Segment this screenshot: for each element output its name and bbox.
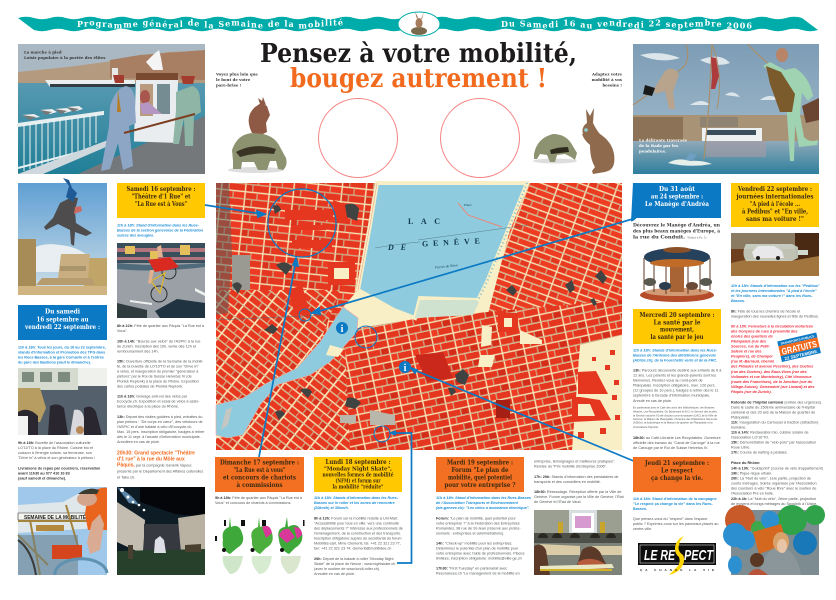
text: vendredi: Plainpalais :	[731, 416, 751, 420]
text: lundi: (avec le soutien de www.lundi-roller.ch).	[314, 567, 380, 571]
badge: transports publics gratuits: 22 SEPTEMBRE	[784, 349, 818, 361]
box: samedi 16 septembre: "Théâtre d'1 Rue" et	[132, 194, 191, 200]
text: samedi programme: des cartes postales de Plonk& Replonk.	[117, 384, 183, 388]
arrow: Dimanche to map	[259, 258, 298, 457]
box: du samedi au vendredi: vendredi 22 septembre :	[24, 324, 100, 331]
text: vendredi: Pâquis (rue de Zurich).	[731, 390, 772, 394]
text: lundi: 8h à 13h: Forum sur la mobilité réduite à Uni-Mail:	[314, 516, 398, 520]
icon: hare	[582, 108, 614, 174]
text: samedi programme	[117, 324, 205, 480]
text: lundi	[314, 496, 403, 576]
text: mardi: 17h30: "First Tuesday" en partenariat avec	[436, 566, 507, 570]
box: dimanche: "La Rue est à vous"	[234, 467, 286, 474]
text: dimanche	[215, 496, 303, 505]
text: stands information: 11h à 18h: Tous les jours, du 16 au 22 septembre,	[18, 346, 106, 350]
text: manège: des plus beaux manèges d'Europe, à	[633, 228, 720, 234]
text: samedi programme: 10h à 14h: "Bourse aux vélos" de l'ASPIC à la rue	[117, 340, 200, 344]
text: stand samedi	[117, 224, 204, 238]
logo: le respect: ÇA CHANGE LA VIE	[640, 568, 714, 572]
text: mercredi: (12 groupes de 10 pers.), badges à retirer dès le 11	[633, 388, 718, 392]
badge: transports publics gratuits: TRANSPORTS PUBLICS	[780, 334, 815, 346]
box: du 31 août: Le Manège d'Andréa	[645, 201, 709, 208]
photo caption: La marche à pied	[24, 50, 62, 54]
header banner	[18, 12, 818, 36]
box: vendredi: journées internationales	[736, 194, 814, 200]
box: mercredi	[633, 309, 721, 344]
text: samedi programme: 11h à 18h: Gravage anti-vol des vélos par	[117, 394, 188, 398]
text: lundi: Basses sur le roller et les zones de rencontre	[314, 501, 395, 505]
text: vendredi: Place du Rhône:	[731, 461, 760, 465]
box: vendredi: à Pedibus" et "En ville,	[742, 208, 808, 216]
text: manège: Découvrez le Manège d'Andréa, un	[633, 222, 721, 228]
text: vendredi: Rotonde de l'hôpital cantonal (entrée des urgences).	[731, 400, 822, 404]
text: vendredi: 8h: Fête de tous les chemins de l'école et	[731, 310, 801, 314]
text: vendredi: 15h: Démonstration de "vélo-polo" par l'association	[731, 440, 816, 444]
text: vendredi: 11h: Inauguration du Carrousel à traction (attraction)	[731, 420, 819, 424]
left note: Voyez plus loin que	[215, 72, 258, 76]
text: samedi programme: tance électrique à la place du Rhône.	[117, 404, 179, 408]
box: du 31 août: au 24 septembre :	[651, 194, 703, 200]
text: mardi: limitées, inscription obligatoire: mobilite@ville-ge.ch	[436, 556, 522, 560]
text: vendredi: des Pléiades et avenue Peschier), des Ouches	[731, 364, 813, 368]
text: dimanche: 9h à 18h: Fête de quartier aux Pâquis "La Rue est à	[215, 496, 303, 500]
box: mardi: Mardi 19 septembre :	[447, 460, 513, 466]
box: mardi: Forum "Le plan de	[452, 467, 509, 474]
box: lundi: la mobilité "réduite"	[332, 484, 384, 490]
text: manège: Ticket à Fr. 5.-	[687, 236, 708, 240]
box: lundi: Lundi 18 septembre :	[326, 459, 390, 466]
box: lundi: (NFM) et forum sur	[336, 478, 381, 484]
text: lundi: Skate" de la place de Neuve ; www.nightskate.ch	[314, 562, 395, 566]
box: du 31 août	[631, 183, 721, 222]
photo: conference	[534, 510, 622, 575]
logo: le respect	[638, 536, 716, 575]
banner oval emblem	[398, 12, 440, 36]
text: mercredi	[633, 348, 722, 450]
box: du samedi au vendredi: 16 septembre au	[36, 316, 89, 324]
text: vendredi: Village-Suisse), Geisendorf (rue Liotard) et des	[731, 385, 814, 389]
box: mercredi: mouvement,	[660, 326, 694, 334]
text: vendredi: Dans le cadre du 150ème anniversaire de l'Hôpital	[731, 406, 815, 410]
info markers: i	[341, 324, 344, 335]
circle right	[440, 98, 520, 178]
box: vendredi	[731, 183, 819, 227]
box: mardi: mobilité, quel potentiel	[448, 474, 513, 482]
photo caption: de la Rade par les	[639, 143, 679, 148]
text: stand samedi: 11h à 18h: Stand d'information dans les Rues-	[117, 224, 200, 228]
photo: stunt bike	[117, 243, 205, 318]
map labels: DE	[387, 243, 406, 252]
box: vendredi: "A pied à l'école ...	[750, 201, 800, 208]
text: vendredi: 22h à 4h: La "Nuit du vélo", 2ème partie, projection	[731, 497, 816, 501]
text: jeudi: Basses.	[633, 507, 647, 511]
info markers: i	[404, 363, 407, 374]
text: mercredi: chocolaterie Pignolet.	[633, 425, 659, 429]
arrow: Jeudi to map	[411, 368, 636, 462]
text: samedi programme: Vous".	[117, 329, 128, 333]
text: stands information	[18, 346, 106, 364]
info markers	[336, 322, 411, 374]
text: vendredi: humaine.	[731, 426, 746, 430]
text: mardi: 17h: 20h: Stands d'information des prestataires de	[534, 475, 619, 479]
text: vendredi: courts métrages. Soirée organisée par l'Association	[731, 482, 817, 486]
box: du 31 août: Du 31 août	[659, 186, 695, 193]
text: vendredi: (route des Franchises), de la Jonction (rue du	[731, 380, 813, 384]
text: mardi: 18h30: Réseautage. Réception offerte par la Ville de	[534, 490, 621, 494]
text: vendredi: (rue des Ouches), des Eaux-Vives (rue des	[731, 370, 807, 374]
box: samedi 16 septembre: Samedi 16 septembre :	[126, 186, 196, 193]
text: stands information: stands d'information et Promotion des TPG dans	[18, 350, 105, 354]
text: samedi programme: de Zurich. Inscription dès 10h, vente dès 12h et	[117, 344, 197, 348]
text: vendredi: Sources, rue du Petit-	[731, 344, 771, 348]
text: vendredi: Plainpalais (rue des	[731, 340, 766, 344]
illustration: shopping trolleys	[215, 517, 304, 574]
text: vendredi: écoles des quartiers de	[731, 334, 773, 338]
text: stand samedi: Basses de la section genevoise de la Fédération	[117, 228, 204, 232]
arrow: Manège to map	[312, 218, 636, 314]
text: samedi programme: à vélos, et inauguration du premier "générateur à	[117, 370, 199, 374]
text: lundi: (20km/h) et 30km/h.	[314, 506, 349, 510]
photo: car in bottle	[731, 233, 819, 276]
box: jeudi	[633, 457, 721, 492]
text: mercredi: 12 ans. Les parents et les grands-parents sont les	[633, 374, 716, 378]
text: buvette: LO'10'TO à la place du Rhône. Cuisine bio et	[18, 446, 94, 450]
box: vendredi: sans ma voiture !"	[746, 216, 804, 223]
text: vendredi: l'Association Pré en bulle.	[731, 492, 774, 496]
text: mardi: votre entreprise ?" à la Fédération des Entreprises	[436, 522, 520, 526]
title: bougez autrement !	[290, 64, 547, 94]
box: du samedi au vendredi	[18, 305, 107, 340]
text: buvette	[18, 441, 101, 480]
text: mardi: votre entreprise avec l'aide de professionnels. Places	[436, 552, 525, 556]
text: vendredi: Roue Libre.	[731, 446, 750, 450]
text: manège: la rue du Conduit.	[633, 234, 685, 240]
box: jeudi: ça change la vie.	[651, 475, 703, 482]
text: lundi: 11h à 18h: Stands d'information dans les Rues-	[314, 496, 399, 500]
illustration: carousel	[640, 247, 714, 302]
right note: mobilité à vos	[592, 77, 623, 82]
text: buvette: cuisson à l'énergie solaire, sa fermeuse, son	[18, 451, 92, 455]
text: vendredi: Basses.	[731, 299, 745, 303]
text: mercredi: Annulé en cas de pluie.	[633, 399, 672, 403]
map labels: GENÈVE	[422, 235, 480, 248]
text: mercredi: 11h à 18h: Stands d'information dans les Rues-	[633, 348, 718, 352]
text: samedi programme: l'ASPIC et d'une balade à vélo d'Ecocycle.ch.	[117, 425, 192, 429]
logo: le respect: PECT	[684, 547, 714, 564]
text: vendredi	[731, 284, 824, 506]
text: jeudi: centre-ville.	[633, 527, 652, 531]
text: mercredi: Genève, la Maison de Plainpalais, l'Antenne des Diététiciens Genevois	[633, 417, 718, 421]
map of Geneva	[216, 183, 622, 450]
photo caption: pendulaires.	[639, 148, 667, 154]
text: vendredi: Salève et rue des	[731, 350, 762, 354]
text: vendredi: et les journées internationales "A pied à l'école"	[731, 289, 817, 293]
text: mercredi: bienvenus. Rendez-vous au rond-point de	[633, 378, 703, 382]
text: vendredi: 17h: Course de karting à pédales.	[731, 450, 788, 454]
box: mercredi: Mercredi 20 septembre :	[640, 312, 714, 319]
title: Pensez à votre mobilité,	[260, 39, 577, 69]
text: mardi: Genève. Forum organisé par la Ville de Genève, l'État	[534, 494, 625, 499]
text: mardi	[436, 460, 625, 576]
text: mercredi: officielle des travaux du "Canal de Carouge" à la rue	[633, 441, 720, 445]
text: mardi: de Genève et l'État de Vaud.	[534, 499, 582, 504]
left note: pare-brise !	[216, 82, 242, 88]
left note: le bout de votre	[216, 77, 251, 82]
photo caption: Loisir populaire à la portée des élites	[24, 55, 106, 60]
photo: sedan chair on the quay	[18, 44, 205, 174]
text: mercredi: 13h: Parcours découverte destiné aux enfants de 6 à	[633, 368, 722, 372]
arrow: Lundi to map	[391, 431, 412, 563]
text: lundi: Inscription obligatoire auprès du secrétariat du forum	[314, 536, 402, 540]
right note: besoins !	[602, 82, 622, 88]
logo: le respect: LE RE	[644, 547, 676, 564]
text: samedi programme: Annulées en cas de pluie.	[117, 440, 160, 444]
banner right text: Du Samedi 16 au vendredi 22 septembre 2006	[501, 18, 752, 30]
text: vendredi: 20h: La "Nuit du vélo", 1ère partie, projection de	[731, 476, 811, 480]
box: mardi	[436, 457, 524, 492]
text: lundi: des déplacements ?" Intéresse aux professionnels de	[314, 526, 403, 530]
text: vendredi: inauguration des nouvelles lignes et fête du Pedibus.	[731, 314, 819, 318]
box: dimanche	[215, 457, 304, 492]
text: mercredi: la Service social et l'Unité d'action communautaire (UAC) de la Ville de	[633, 414, 718, 418]
map labels: Pierres du Niton	[434, 263, 458, 270]
text: buvette: Livraisons de repas par coursiers, réservation	[18, 466, 101, 470]
text: mercredi: septembre à l'arcade d'information municipale.	[633, 394, 710, 398]
box: mardi: pour votre entreprise ?	[444, 482, 516, 489]
Rhône river	[216, 307, 358, 438]
text: vendredi: des coursiers à vélo "Roue libre" avec le soutien de	[731, 486, 816, 490]
text: buvette: avant 11h30 au 077 410 10 83	[18, 472, 70, 476]
box: dimanche: à commissions	[236, 482, 283, 489]
text: samedi programme: dès le 11 sept. à l'arcade d'information municipale.	[117, 435, 201, 439]
text: mardi: entreprise, témoignages et meilleures pratiques".	[534, 460, 615, 464]
text: mercredi: Plainpalais. Inscription obligatoire, max. 120 pers.	[633, 384, 716, 388]
text: samedi programme: 13h: Départ des visites guidées à pied, extraites du	[117, 415, 202, 419]
box: jeudi: Jeudi 21 septembre :	[644, 460, 709, 467]
text: mercredi: (ADiGe.ch), de la Fourchette verte et de la FRC.	[633, 358, 717, 362]
text: samedi programme: 15h: Ouverture officielle de la Semaine de la mobili-	[117, 360, 204, 364]
text: samedi programme: té, de la buvette de LO'10'TO et de son "Drive In"	[117, 364, 199, 368]
photo: night spectacle	[117, 487, 205, 575]
text: mardi: de l'Association Transports et Environnement	[436, 501, 519, 505]
text: buvette: (sauf samedi et dimanche).	[18, 476, 66, 480]
text: mardi: Déterminez le potentiel d'un plan de mobilité pour	[436, 546, 519, 550]
box: mercredi: la santé par le jeu	[650, 334, 704, 341]
text: mercredi: de Carouge par le Roi de Suisse Helvetus IV.	[633, 446, 708, 450]
arrow: Samedi to map	[205, 205, 265, 217]
text: samedi programme: d'1 rue" à la rue du Môle aux	[117, 456, 185, 462]
text: samedi programme: Plonk& Replonk) à la place du Rhône. Exposition	[117, 380, 199, 384]
box: samedi 16 septembre: "La Rue est à Vous"	[135, 201, 187, 208]
left note	[215, 72, 258, 88]
box: lundi: nouvelles formes de mobilité	[322, 472, 394, 478]
box: jeudi: Le respect	[661, 468, 693, 474]
badge: transports publics gratuits	[777, 333, 821, 362]
photo: balloons and children	[723, 505, 825, 575]
text: samedi programme: 8h à 22h: Fête de quartier aux Pâquis "La Rue est à	[117, 324, 205, 328]
right note: Adaptez votre	[591, 72, 623, 76]
text: mercredi: Basses de l'Antenne des diététiciens genevois	[633, 354, 716, 358]
text: stands information: les Rues Basses, à la gare Cornavin et à l'entrée	[18, 356, 104, 360]
text: vendredi: 19h: Pique-nique urbain.	[731, 472, 772, 476]
text: mercredi: En partenariat avec le Café des amis des bibliothèques, les librairies	[633, 406, 715, 410]
photo caption	[639, 138, 688, 154]
box: samedi 16 septembre	[117, 183, 205, 218]
lake	[358, 183, 527, 318]
text: vendredi: l'association LO'10'TO.	[731, 436, 769, 440]
text: jeudi: public ? Exprimez-vous sur les panneaux placés au	[633, 522, 718, 526]
text: mercredi: (ADiGe), la ludothèque et la Maison de quartier de Plainpalais et la	[633, 420, 713, 424]
text: samedi programme: présenté par le Département des Affaires culturelles	[117, 470, 203, 474]
text: lundi: l'aménagement, de la construction et des transports.	[314, 532, 401, 536]
circle left	[318, 98, 398, 178]
text: mardi: transports et des conseillers en mobilité.	[534, 480, 601, 484]
text: vendredi: des tronçons de rues à proximité des	[731, 330, 797, 334]
map circles	[268, 189, 390, 442]
box: lundi	[314, 457, 402, 492]
text: samedi programme: Max. 15 pers. Inscription obligatoire, badges à retirer	[117, 430, 205, 434]
text: lundi: Mobilités-sàrl, Mme Clementi, tél. +41 22 321 23 77,	[314, 542, 401, 546]
text: lundi: fax: +41 22 321 23 74, clementi@mobilidee.ch	[314, 546, 391, 550]
text: samedi programme: Ecocycle.ch. Exposition et essai de vélos à assis-	[117, 400, 200, 404]
text: vendredi: Vollandes et rue Montchoisy), Cité Vieusseux	[731, 375, 812, 379]
text: mardi: Forum: "Le plan de mobilité, quel potentiel pour	[436, 516, 516, 520]
text: stands information: du parc des Bastions (sauf le dimanche).	[18, 360, 91, 364]
box: vendredi: Vendredi 22 septembre :	[737, 186, 812, 193]
map labels	[387, 203, 480, 270]
text: samedi programme: et Tako.ch.	[117, 476, 135, 480]
photo: street stand crowd	[18, 368, 107, 435]
photo: bike stand	[18, 487, 107, 575]
text: jeudi: Que pensez-vous du "respect" dans l'espace	[633, 517, 707, 521]
text: vendredi: 8h à 18h: Fermeture à la circulation motorisée	[731, 324, 813, 328]
box: du samedi au vendredi: Du samedi	[45, 308, 81, 316]
text: manège	[633, 222, 721, 240]
text: samedi programme: piétons" par le Roi de Suisse Helvetus IV (de	[117, 374, 192, 378]
text: buvette: "Drive in" à vélos et son générateur à piétons !	[18, 456, 95, 460]
text: jeudi	[633, 497, 718, 531]
text: stand samedi: suisse des aveugles.	[117, 234, 154, 238]
text: jeudi: 11h à 18h: Stand d'information de la campagne	[633, 497, 717, 501]
banner left text: Programme général de la Semaine de la mobilité	[77, 18, 343, 30]
text: samedi programme: Pâquis, par la compagnie Générik Vapeur,	[117, 462, 192, 468]
text: samedi programme: plan piétons : "De corps en cœur", des vélotours de	[117, 420, 203, 424]
text: mercredi: 18h30: au Café-Librairie Les Recyclables. Ouverture	[633, 436, 721, 440]
text: mardi: (ate-geneve.ch): "Les vélos à assistance électrique".	[436, 506, 530, 510]
icon: tortoise	[533, 134, 577, 164]
text: vendredi: 11h à 18h: Stands d'information sur les "Pedibus"	[731, 284, 820, 288]
harbour pier	[415, 300, 479, 318]
text: samedi programme: 20h30: Grand spectacle "Théâtre	[117, 450, 195, 456]
text: mardi: Resonances.ch "Le management de la mobilité en	[436, 572, 520, 576]
text: lundi: Annulée en cas de pluie.	[314, 572, 355, 576]
badge: transports publics gratuits: GRATUITS	[781, 339, 818, 357]
text: samedi programme: remboursement dès 14h.	[117, 350, 159, 354]
text: vendredi: de moyens et longs métrages au Spoutnik à l'Usine.	[731, 502, 817, 506]
box: mercredi: La santé par le	[654, 320, 701, 326]
box: dimanche: et concours de chariots	[223, 474, 296, 482]
text: vendredi: 11h à 14h: Restauration bio, cuisine solaire de	[731, 430, 809, 434]
text: mardi: Remise du "Prix mobilité d'entreprise 2006".	[534, 464, 607, 468]
text: vendredi: et "En ville, sans ma voiture !" dans les Rues-	[731, 294, 813, 298]
photo: bike stand: SEMAINE DE LA MOBILITÉ	[24, 513, 87, 521]
text: vendredi: Peupliers), de Champel	[731, 354, 773, 358]
text: mardi: Romandes, 98 rue de St-Jean (réservé aux profes-	[436, 526, 521, 530]
text: dimanche: Vous" et concours de chariots à commissions.	[215, 501, 291, 505]
text: mardi: sionnels : entreprises et administrations).	[436, 532, 504, 536]
title	[260, 39, 577, 94]
text: mercredi: Histoire, Les Recyclables, Du Boulevard et 60.2, le Service des écoles,	[633, 410, 718, 414]
text: mardi: 11h à 18h: Stand d'information dans les Rues-Basses	[436, 496, 531, 500]
text: lundi: 20h: Départ de la balade à roller "Monday Night	[314, 557, 394, 561]
map labels: LAC	[408, 217, 440, 226]
map labels: Phare	[463, 203, 472, 207]
text: buvette: 9h à 18h: Buvette de l'association culturelle	[18, 441, 91, 445]
icon: hare on tortoise	[228, 97, 287, 173]
text: jeudi: "Le respect ça change la vie" dans les Rues-	[633, 502, 713, 506]
photo: flying statue	[18, 178, 107, 295]
photo: commuters swinging on ropes	[633, 44, 819, 174]
text: vendredi: 14h à 19h: "Goldsprint" (course de vélo d'appartement)	[731, 466, 824, 470]
text: vendredi: cantonal et des 20 ans de la Maison de quartier de	[731, 410, 815, 414]
text: lundi: "Accessibilité pour tous en ville: vers une continuité	[314, 522, 399, 526]
photo caption	[24, 50, 106, 60]
photo caption: La délirante traversée	[639, 138, 688, 142]
box: dimanche: Dimanche 17 septembre :	[220, 460, 299, 466]
text: mardi: 14h: "Check-up" mobilité pour les entreprises.	[436, 542, 512, 546]
box: lundi: "Monday Night Skate",	[324, 466, 392, 472]
text: vendredi: (rue M.-Barraud, chemin	[731, 360, 775, 364]
right note	[591, 72, 623, 88]
